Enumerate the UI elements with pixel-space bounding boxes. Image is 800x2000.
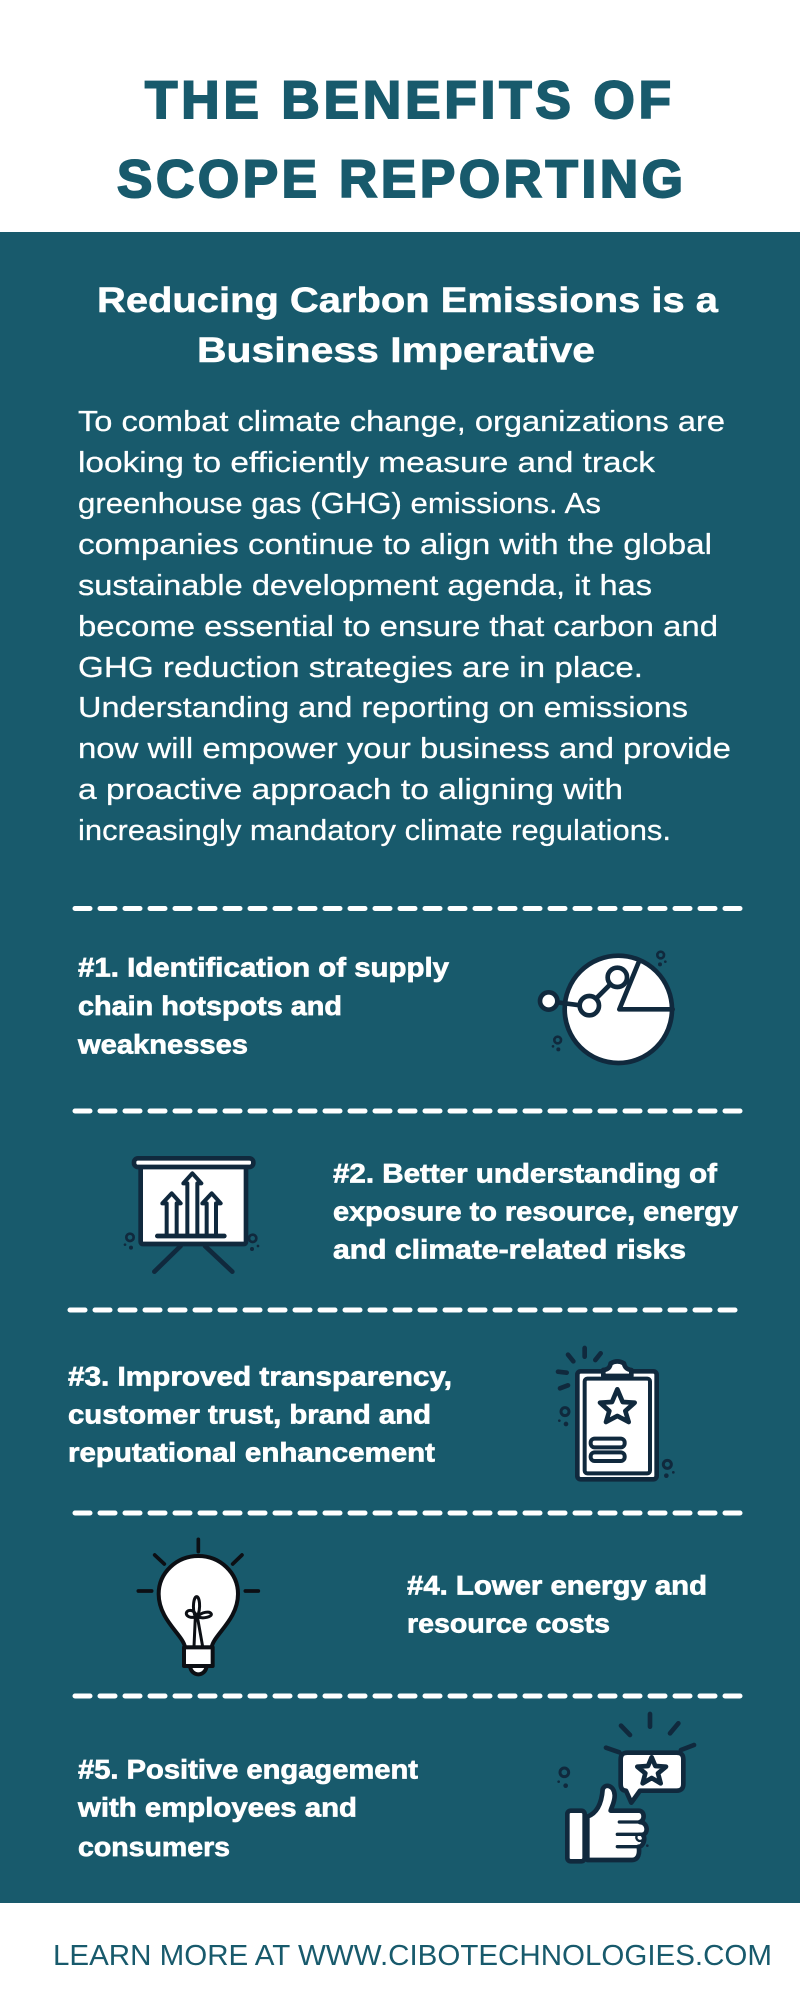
benefit 4 text: #4. Lower energy and [407, 1570, 707, 1600]
benefit 1 text: weaknesses [77, 1030, 248, 1060]
text block: introduction paragraph: sustainable development agenda, it has [78, 570, 652, 602]
footer: website call to action: LEARN MORE AT WWW.CIBOTECHNOLOGIES.COM [53, 1940, 772, 1972]
benefit 2 text: and climate-related risks [333, 1234, 686, 1264]
icon: pie chart with line graph [540, 952, 673, 1063]
text block: introduction paragraph: companies continue to align with the global [78, 529, 712, 561]
benefit 3 text: customer trust, brand and [68, 1400, 431, 1430]
benefit 1 text: chain hotspots and [78, 991, 342, 1021]
icon: thumbs up with star speech bubble [557, 1714, 694, 1861]
benefit 1 text [77, 952, 449, 1060]
text block: introduction paragraph: increasingly mandatory climate regulations. [78, 815, 671, 847]
benefit 2 text: exposure to resource, energy [333, 1196, 738, 1226]
benefit 5 text [77, 1754, 418, 1862]
text block: introduction paragraph: GHG reduction strategies are in place. [78, 652, 643, 684]
text block: introduction paragraph: looking to efficiently measure and track [78, 447, 656, 479]
icon: presentation board with rising arrows [124, 1158, 259, 1272]
benefit 3 text: reputational enhancement [68, 1438, 435, 1468]
benefit 4 text: resource costs [407, 1608, 610, 1638]
icon: light bulb [138, 1539, 258, 1674]
icon: clipboard with star [558, 1348, 675, 1479]
text block: introduction paragraph: now will empower your business and provide [78, 733, 731, 765]
benefit 5 text: consumers [78, 1832, 230, 1862]
benefit 2 text: #2. Better understanding of [333, 1158, 717, 1188]
text block: introduction paragraph: a proactive approach to aligning with [78, 774, 623, 806]
title: SCOPE REPORTING [117, 150, 683, 209]
text block: introduction paragraph: To combat climate change, organizations are [78, 406, 725, 438]
text block: introduction paragraph: become essential to ensure that carbon and [78, 611, 718, 643]
benefit 5 text: #5. Positive engagement [78, 1754, 418, 1784]
benefit 1 text: #1. Identification of supply [78, 952, 449, 982]
benefit 2 text [333, 1158, 738, 1264]
heading: business imperative: Reducing Carbon Emissions is a [97, 281, 719, 320]
text block: introduction paragraph: Understanding and reporting on emissions [78, 692, 688, 724]
text block: introduction paragraph: greenhouse gas (GHG) emissions. As [78, 488, 601, 520]
title [117, 71, 683, 209]
title: THE BENEFITS OF [145, 71, 671, 130]
benefit 3 text: #3. Improved transparency, [68, 1362, 452, 1392]
benefit 4 text [407, 1570, 707, 1638]
text block: introduction paragraph [78, 406, 731, 847]
benefit 5 text: with employees and [77, 1792, 357, 1822]
benefit 3 text [68, 1362, 452, 1468]
heading: business imperative: Business Imperative [197, 331, 595, 370]
heading: business imperative [97, 281, 719, 370]
